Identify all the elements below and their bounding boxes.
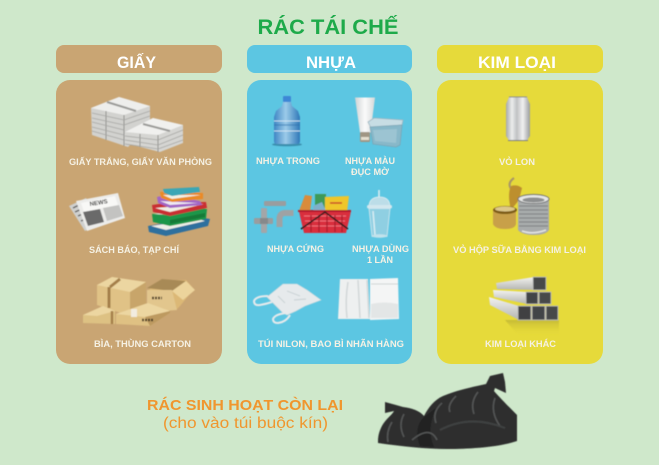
icon: plastic cup	[367, 190, 392, 238]
label: giấy trắng: GIẤY TRẮNG, GIẤY VĂN PHÒNG	[69, 156, 212, 168]
label: bìa thùng carton: BÌA, THÙNG CARTON	[94, 338, 191, 350]
icon: books	[148, 187, 210, 236]
heading: kim loại	[437, 45, 603, 73]
panel body: giấy	[56, 80, 222, 364]
icon: tin cans	[493, 178, 549, 235]
panel: giấy	[56, 45, 222, 364]
icon: black trash bags	[378, 373, 517, 449]
label: kim loại khác: KIM LOẠI KHÁC	[485, 339, 556, 350]
panel: kim loại	[437, 45, 603, 364]
label: nhựa dùng 1 lần: 1 LẦN	[367, 255, 393, 266]
panel body: nhựa	[247, 80, 412, 364]
heading: nhựa: NHỰA	[306, 53, 356, 72]
icon: plastic pipes	[254, 201, 294, 233]
panel body: kim loại	[437, 80, 603, 364]
heading: nhựa	[247, 45, 412, 73]
title: RÁC TÁI CHẾ	[258, 16, 398, 39]
heading: giấy	[56, 45, 222, 73]
text: rác sinh hoạt: (cho vào túi buộc kín)	[163, 415, 328, 432]
icon: newspaper	[69, 193, 125, 231]
icon: carton boxes	[83, 277, 195, 326]
icon: packaging pouches	[338, 278, 399, 320]
label: nhựa trong: NHỰA TRONG	[256, 156, 320, 167]
icon: metal pipes	[489, 277, 559, 336]
heading: giấy: GIẤY	[117, 53, 157, 72]
icon: plastic bag	[254, 284, 321, 323]
icon: tube and clear box	[355, 98, 403, 147]
label: túi nilon: TÚI NILON, BAO BÌ NHÃN HÀNG	[258, 338, 404, 350]
panel: nhựa	[247, 45, 412, 364]
label: vỏ lon: VỎ LON	[499, 156, 535, 168]
icon: newspaper: NEWS	[89, 199, 108, 208]
label: nhựa cứng: NHỰA CỨNG	[267, 243, 324, 255]
label: nhựa dùng 1 lần: NHỰA DÙNG	[352, 243, 409, 255]
label: nhựa màu đục mờ: NHỰA MÀU	[345, 156, 395, 167]
label: sách báo: SÁCH BÁO, TẠP CHÍ	[89, 245, 179, 256]
text: rác sinh hoạt	[147, 396, 343, 432]
icon: shopping basket	[298, 194, 351, 233]
label: vỏ hộp: VỎ HỘP SỮA BẰNG KIM LOẠI	[453, 244, 586, 256]
label: nhựa dùng 1 lần	[352, 243, 409, 266]
icon: aluminium can	[506, 97, 530, 140]
label: nhựa màu đục mờ: ĐỤC MỜ	[351, 166, 390, 178]
icon: newspaper bundles	[91, 97, 183, 152]
label: nhựa màu đục mờ	[345, 156, 395, 178]
text: rác sinh hoạt: RÁC SINH HOẠT CÒN LẠI	[147, 396, 343, 414]
icon: water bottle	[272, 96, 302, 146]
heading: kim loại: KIM LOẠI	[478, 53, 556, 72]
